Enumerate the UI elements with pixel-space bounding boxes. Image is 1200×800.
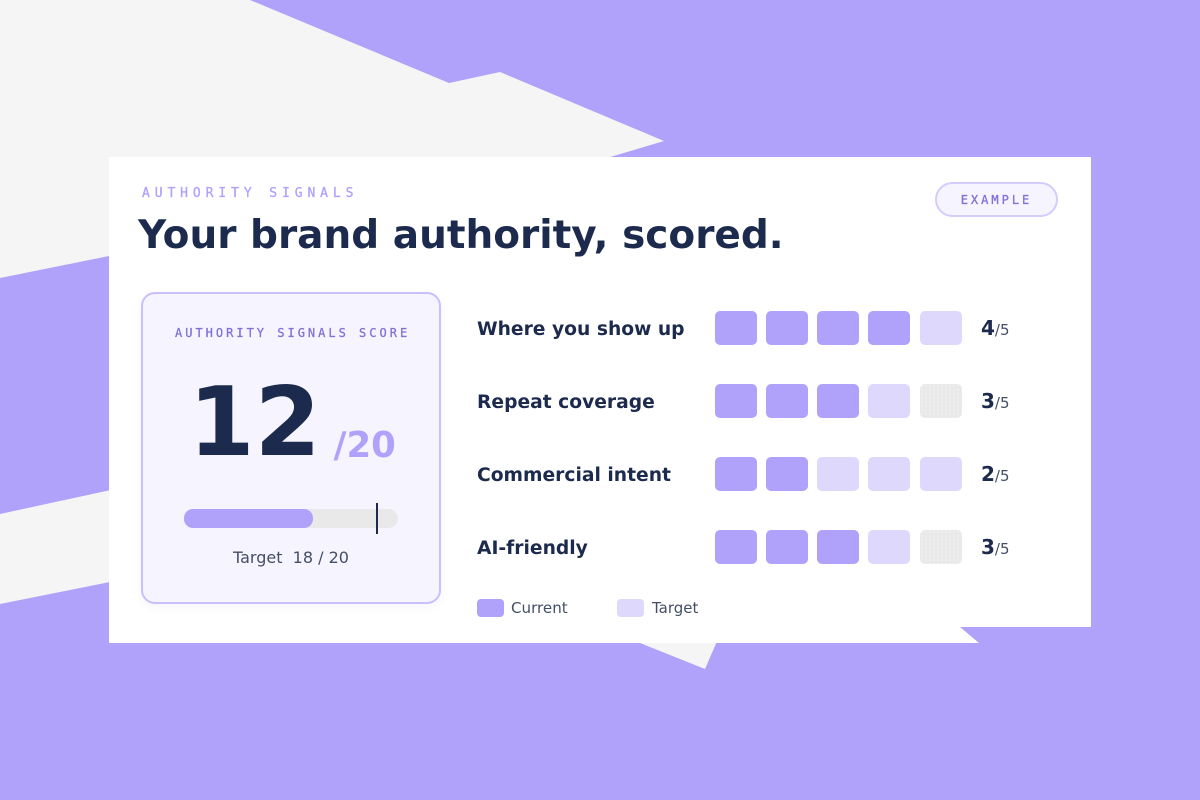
example badge: EXAMPLE: [961, 193, 1032, 207]
example badge: [935, 182, 1058, 217]
row: ai-friendly: [477, 530, 1010, 564]
target text: Target 18 / 20: [233, 548, 349, 567]
score: 3/5: [981, 389, 1010, 413]
eyebrow: AUTHORITY SIGNALS: [142, 186, 358, 201]
legend label current: Current: [511, 598, 568, 616]
legend swatch target: [617, 599, 644, 617]
legend: [477, 598, 698, 617]
progress bar: [184, 503, 398, 534]
label: Commercial intent: [477, 465, 671, 486]
score panel label: AUTHORITY SIGNALS SCORE: [175, 326, 410, 340]
score denominator: /20: [334, 425, 396, 466]
label: AI-friendly: [477, 538, 588, 559]
legend label target: Target: [652, 598, 698, 616]
legend swatch current: [477, 599, 504, 617]
blocks: [715, 384, 962, 418]
score: 3/5: [981, 535, 1010, 559]
row: commercial intent: [477, 457, 1010, 491]
panel: score: [141, 292, 441, 604]
row: repeat coverage: [477, 384, 1010, 418]
score: 4/5: [981, 316, 1010, 340]
score value: 12: [188, 368, 321, 478]
title: Your brand authority, scored.: [138, 213, 784, 258]
label: Repeat coverage: [477, 392, 655, 413]
label: Where you show up: [477, 319, 685, 340]
blocks: [715, 311, 962, 345]
blocks: [715, 530, 962, 564]
row: where you show up: [477, 311, 1010, 345]
score: 2/5: [981, 462, 1010, 486]
blocks: [715, 457, 962, 491]
